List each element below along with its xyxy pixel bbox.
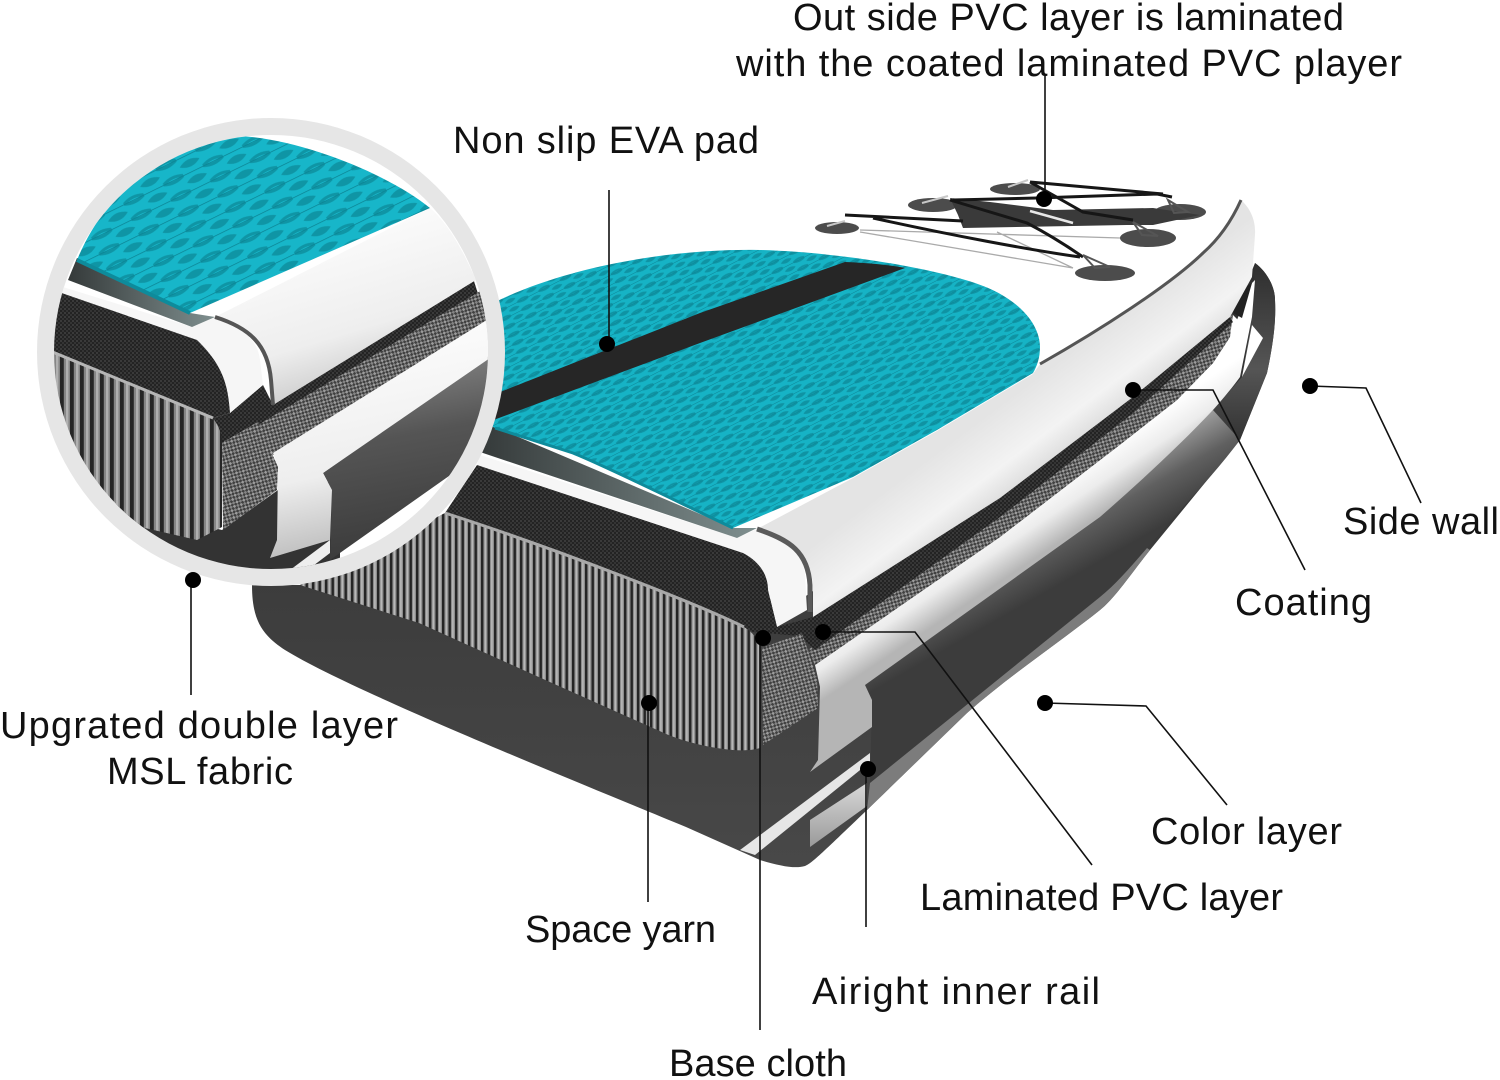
inset detail — [54, 136, 488, 569]
black strap — [480, 262, 905, 425]
ring loops — [1083, 200, 1188, 268]
inset seam — [215, 317, 273, 405]
hull: outer bottom shell — [252, 263, 1275, 867]
central storage patch — [950, 198, 1200, 228]
label: MSL fabric: Upgrated double layer — [0, 705, 398, 747]
label: color layer: Color layer — [1151, 811, 1342, 853]
white slit in outer ring — [1242, 325, 1263, 377]
inset yarn — [50, 351, 222, 540]
leader: color layer — [1037, 695, 1227, 805]
top rail coating — [757, 200, 1255, 617]
label: laminated PVC layer: Laminated PVC layer — [920, 877, 1283, 919]
lower grey rim — [867, 548, 1150, 810]
non-slip pad side shadow — [480, 425, 757, 538]
inset dark mesh — [50, 289, 230, 418]
inset pad side — [68, 258, 215, 327]
inset base cloth mesh — [222, 422, 278, 530]
white nose slit — [1227, 315, 1241, 350]
label: EVA pad: Non slip EVA pad — [453, 120, 759, 162]
pad bottom edge — [495, 428, 733, 528]
inset white corner — [50, 283, 263, 413]
label: MSL fabric — [0, 705, 398, 793]
inset white rail — [270, 318, 490, 558]
label: coating: Coating — [1235, 582, 1372, 624]
dark nose piece — [1233, 283, 1252, 318]
inset teal pad — [77, 136, 430, 313]
inset rail coating — [218, 231, 476, 404]
label: inner rail: Airight inner rail — [812, 971, 1100, 1013]
leader: inner rail — [860, 761, 876, 927]
lower light panel — [810, 783, 867, 847]
airtight inner white rail — [810, 280, 1255, 772]
inset dark mesh filler — [213, 278, 480, 443]
leader: side wall — [1302, 378, 1421, 503]
leader: base cloth — [755, 630, 771, 1030]
zoomed inset circle — [37, 118, 505, 600]
inset dark base — [116, 482, 340, 569]
inset side wall panel — [323, 356, 488, 560]
deck accessories: bungee and D-rings — [815, 180, 1206, 281]
dark mesh front — [445, 465, 777, 632]
leader: laminated PVC — [815, 624, 1092, 865]
dark mesh band — [753, 317, 1233, 650]
teal EVA pad — [480, 250, 1040, 528]
yarn top border — [445, 513, 744, 627]
base cloth side mesh — [762, 633, 818, 745]
label: side wall: Side wall — [1343, 501, 1499, 543]
light mesh band — [808, 313, 1233, 665]
label: outer PVC layer: with the coated laminated PVC player — [735, 43, 1402, 85]
inset ring — [37, 118, 505, 586]
board illustration — [252, 200, 1275, 867]
D-ring pads — [815, 183, 1206, 281]
leader: space yarn — [641, 695, 657, 902]
thin cords — [860, 230, 1120, 268]
leader: EVA pad — [599, 190, 615, 352]
outer ring on the nose — [1213, 263, 1275, 440]
leader: top PVC layer — [1036, 75, 1052, 207]
label: space yarn: Space yarn — [525, 909, 716, 951]
inset pad edge — [77, 260, 190, 313]
inset background — [54, 135, 488, 569]
deck edge line — [1040, 200, 1241, 364]
patch highlight — [1030, 211, 1073, 223]
leader: MSL fabric — [185, 572, 201, 695]
label: MSL fabric: MSL fabric — [107, 751, 293, 793]
lower white stripe — [740, 753, 870, 855]
white front corner piece — [477, 455, 807, 627]
bungee cords — [845, 182, 1172, 257]
inset light mesh band — [258, 290, 487, 455]
rail seam — [757, 529, 810, 612]
ring highlights — [827, 180, 1028, 226]
space yarn stripes — [300, 513, 760, 750]
side wall panel — [865, 410, 1240, 783]
label: outer PVC layer — [735, 0, 1402, 85]
leader: coating — [1125, 382, 1305, 570]
inset lower stripe — [292, 540, 330, 568]
inset yarn border — [50, 351, 213, 418]
